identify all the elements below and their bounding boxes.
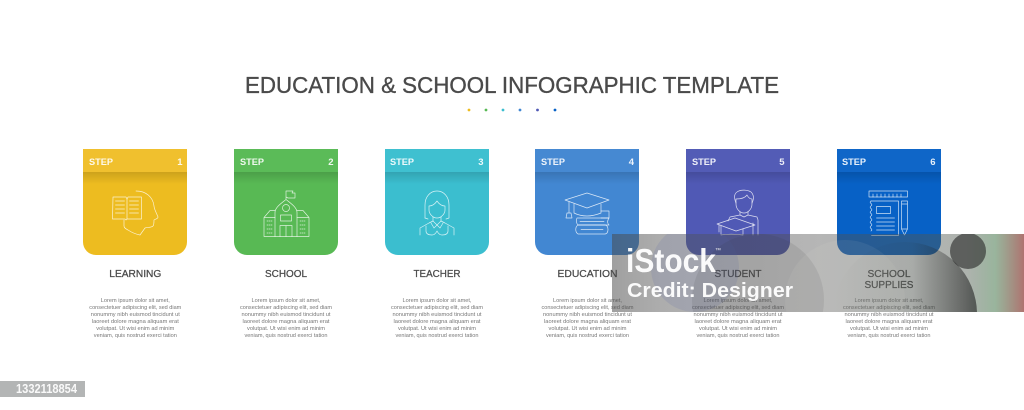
decorative coloured dots xyxy=(468,109,556,111)
body text: volutpat. Ut wisi enim ad minim xyxy=(699,326,777,332)
body text: Lorem ipsum dolor sit amet, xyxy=(553,298,622,304)
card 1 header xyxy=(83,149,187,184)
body text: consectetuer adipiscing elit, sed diam xyxy=(240,305,332,311)
body text: consectetuer adipiscing elit, sed diam xyxy=(692,305,784,311)
label: school: SCHOOL xyxy=(265,269,307,280)
card 4 header: STEP xyxy=(541,157,566,168)
icon: teacher xyxy=(420,191,454,235)
card 6 background xyxy=(837,149,941,255)
card 4 header: 4 xyxy=(629,157,635,168)
label: learning: LEARNING xyxy=(109,269,162,280)
card 5 background xyxy=(686,149,790,255)
title: EDUCATION & SCHOOL INFOGRAPHIC TEMPLATE xyxy=(245,72,779,98)
watermark logo: iStock xyxy=(626,242,717,279)
card 2 header: 2 xyxy=(328,157,334,168)
card 4 background xyxy=(535,149,639,255)
body text: consectetuer adipiscing elit, sed diam xyxy=(542,305,634,311)
card 1 header: STEP xyxy=(89,157,114,168)
body text: laoreet dolore magna aliquam erat xyxy=(694,319,782,325)
body text: volutpat. Ut wisi enim ad minim xyxy=(850,326,928,332)
icon: graduation cap and books xyxy=(565,193,609,234)
panel: step 3 teacher xyxy=(385,149,489,339)
panel: step 5 student xyxy=(686,149,790,339)
watermark credit: Credit: Designer xyxy=(627,280,793,302)
body text: veniam, quis nostrud exerci tation xyxy=(546,333,629,339)
body text: consectetuer adipiscing elit, sed diam xyxy=(89,305,181,311)
card 5 header: 5 xyxy=(779,157,785,168)
card 1 header: 1 xyxy=(177,157,183,168)
trademark: ™ xyxy=(715,247,721,254)
card 6 header: STEP xyxy=(842,157,867,168)
card 3 background xyxy=(385,149,489,255)
label: education: EDUCATION xyxy=(558,269,618,280)
image id badge: 1332118854 xyxy=(16,382,77,396)
card 2 header: STEP xyxy=(240,157,265,168)
card 2 header xyxy=(234,149,338,184)
panel: step 2 school xyxy=(234,149,338,339)
body text: volutpat. Ut wisi enim ad minim xyxy=(96,326,174,332)
body text: veniam, quis nostrud exerci tation xyxy=(696,333,780,339)
body text: Lorem ipsum dolor sit amet, xyxy=(704,298,772,304)
body text: laoreet dolore magna aliquam erat xyxy=(394,319,481,325)
body text: nonummy nibh euismod tincidunt ut xyxy=(543,312,633,318)
label: school supplies: SCHOOL xyxy=(868,269,911,280)
body text: consectetuer adipiscing elit, sed diam xyxy=(391,305,483,311)
watermark band xyxy=(612,234,1024,312)
body text: volutpat. Ut wisi enim ad minim xyxy=(398,326,476,332)
card 5 header xyxy=(686,149,790,184)
body text: veniam, quis nostrud exerci tation xyxy=(848,333,931,339)
panel: step 1 learning xyxy=(83,149,187,339)
body text: laoreet dolore magna aliquam erat xyxy=(846,319,933,325)
translucent band with circles xyxy=(612,234,1024,312)
card 6 header xyxy=(837,149,941,184)
card 5 header: STEP xyxy=(692,157,717,168)
icon: notebook, ruler and pencil xyxy=(869,191,908,236)
body text: volutpat. Ut wisi enim ad minim xyxy=(247,326,325,332)
icon: book and head xyxy=(112,191,158,235)
card 4 header xyxy=(535,149,639,184)
body text: laoreet dolore magna aliquam erat xyxy=(92,319,179,325)
body text: veniam, quis nostrud exerci tation xyxy=(244,333,328,339)
card 3 header xyxy=(385,149,489,184)
body text: laoreet dolore magna aliquam erat xyxy=(242,319,330,325)
body text: laoreet dolore magna aliquam erat xyxy=(544,319,632,325)
icon: school building xyxy=(264,191,309,236)
body text: consectetuer adipiscing elit, sed diam xyxy=(843,305,935,311)
card 2 background xyxy=(234,149,338,255)
body text: nonummy nibh euismod tincidunt ut xyxy=(242,312,331,318)
body text: Lorem ipsum dolor sit amet, xyxy=(854,298,924,304)
body text: nonummy nibh euismod tincidunt ut xyxy=(392,312,482,318)
panel: step 6 school supplies xyxy=(837,149,941,339)
label: school supplies: SUPPLIES xyxy=(864,280,914,291)
label: student: STUDENT xyxy=(714,269,762,280)
icon: student xyxy=(717,190,758,235)
panel: step 4 education xyxy=(535,149,639,339)
body text: veniam, quis nostrud exerci tation xyxy=(396,333,479,339)
label: teacher: TEACHER xyxy=(414,269,460,280)
body text: Lorem ipsum dolor sit amet, xyxy=(402,298,472,304)
body text: Lorem ipsum dolor sit amet, xyxy=(101,298,170,304)
card 1 background xyxy=(83,149,187,255)
card 3 header: STEP xyxy=(390,157,415,168)
card 3 header: 3 xyxy=(478,157,484,168)
card 6 header: 6 xyxy=(930,157,936,168)
body text: Lorem ipsum dolor sit amet, xyxy=(252,298,320,304)
body text: nonummy nibh euismod tincidunt ut xyxy=(694,312,783,318)
body text: volutpat. Ut wisi enim ad minim xyxy=(548,326,626,332)
body text: nonummy nibh euismod tincidunt ut xyxy=(91,312,180,318)
body text: veniam, quis nostrud exerci tation xyxy=(94,333,177,339)
body text: nonummy nibh euismod tincidunt ut xyxy=(844,312,934,318)
